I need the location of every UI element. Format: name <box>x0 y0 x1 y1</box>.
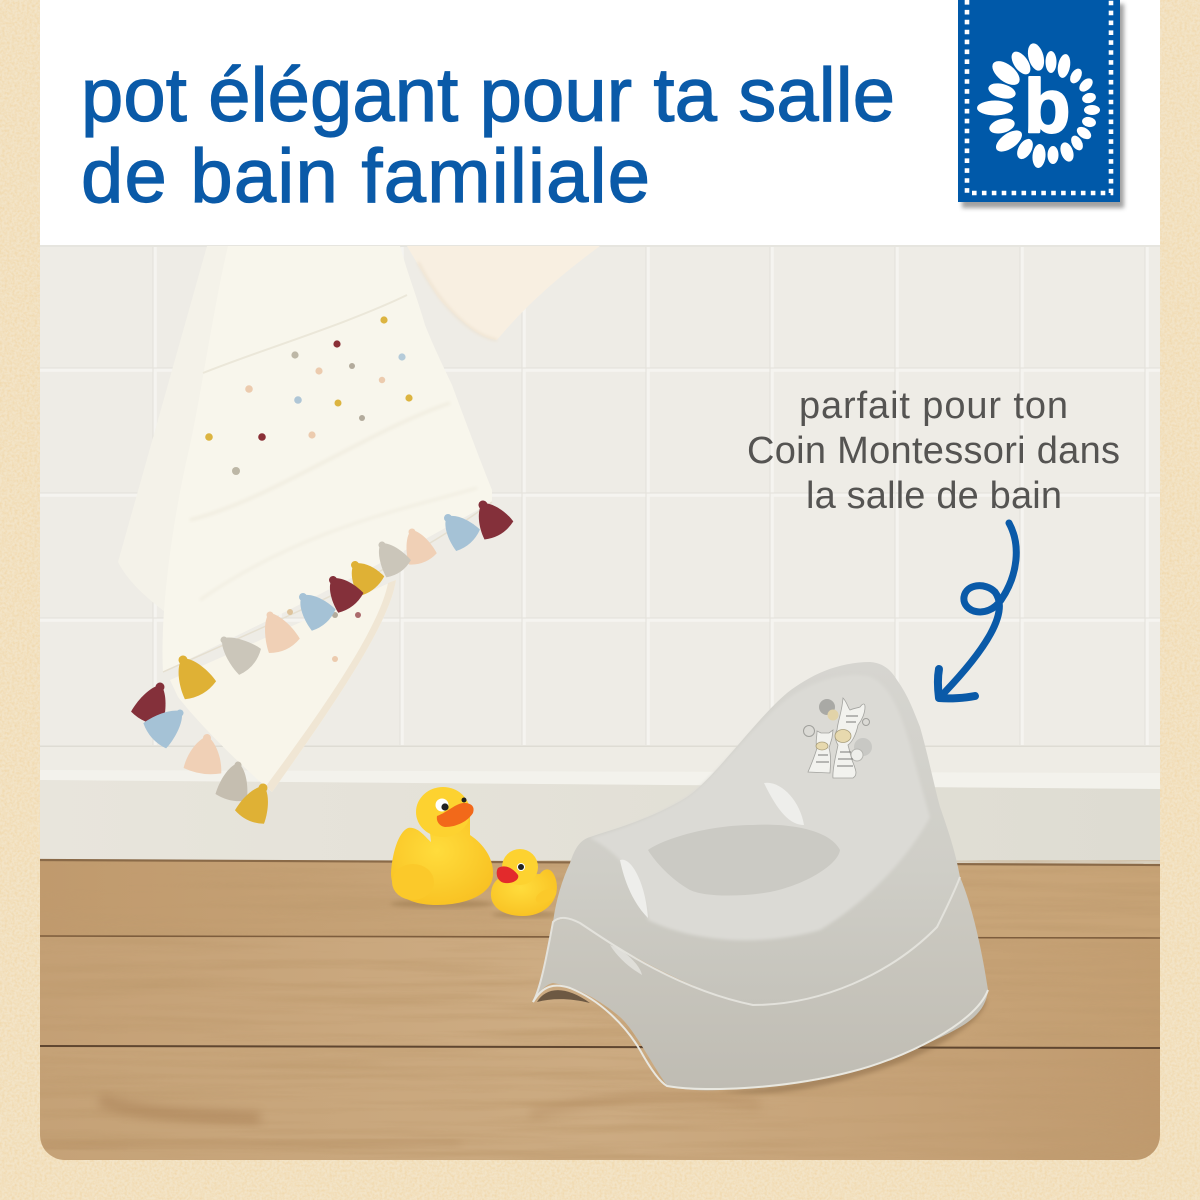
potty lower base <box>533 877 988 1090</box>
towel lower flap <box>170 580 396 792</box>
callout text: la salle de bain <box>806 475 1062 517</box>
wooden floor <box>40 860 1160 1160</box>
title <box>81 53 895 219</box>
tiled wall <box>40 245 1160 789</box>
duck beak <box>437 803 474 827</box>
logo flower petals <box>977 42 1100 169</box>
embroidered dots <box>205 316 413 662</box>
logo letter: b <box>1024 64 1070 149</box>
back folded towel <box>407 246 600 340</box>
potty <box>533 662 988 1093</box>
photo: bathroom scene <box>40 245 1160 1160</box>
small duck beak <box>497 866 518 883</box>
title: de bain familiale <box>81 134 650 219</box>
potty floor shadow <box>720 998 986 1093</box>
hand-drawn arrow <box>938 523 1016 698</box>
skirting board <box>40 746 1160 866</box>
potty glossy highlights <box>610 783 804 975</box>
callout text <box>747 385 1120 517</box>
zebra decal <box>804 698 872 778</box>
title: pot élégant pour ta salle <box>81 53 895 138</box>
potty rim <box>594 714 928 940</box>
towel front panel <box>162 246 492 672</box>
small rubber duck <box>491 849 559 918</box>
brand logo label <box>958 0 1124 208</box>
small duck wing <box>556 892 557 896</box>
potty seat opening <box>648 825 840 896</box>
towels <box>118 246 600 827</box>
big rubber duck <box>390 787 494 908</box>
white header band <box>40 0 1160 245</box>
duck eye <box>436 798 466 812</box>
potty seams and rim edge <box>533 877 960 1005</box>
towel rear layer <box>138 246 228 602</box>
tassels <box>130 492 515 827</box>
small duck eye <box>517 863 525 871</box>
potty upper body <box>553 662 960 1005</box>
callout text: Coin Montessori dans <box>747 430 1120 472</box>
potty arch shadow <box>537 990 590 1003</box>
callout text: parfait pour ton <box>799 385 1068 427</box>
